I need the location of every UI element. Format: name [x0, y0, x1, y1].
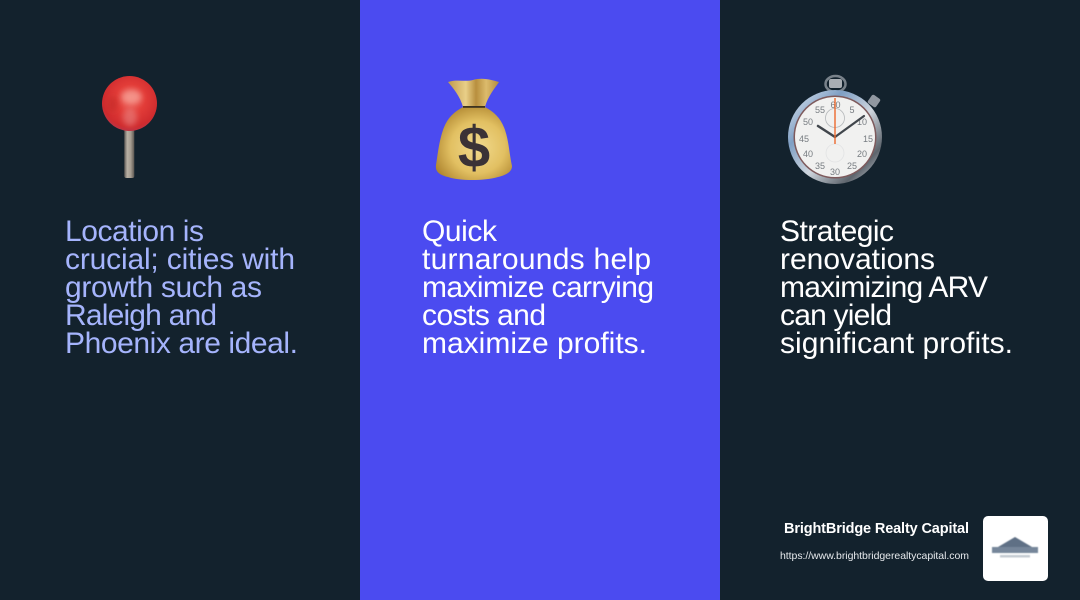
dial numerals: 60 — [830, 100, 841, 110]
text: renovation tip: renovations — [780, 243, 935, 276]
text: turnaround tip: Quick — [422, 215, 498, 248]
text: turnaround tip — [422, 215, 654, 360]
dial numerals: 15 — [863, 134, 873, 144]
dial numerals: 35 — [815, 161, 825, 171]
text: renovation tip: maximizing ARV — [780, 271, 988, 304]
dial numerals: 10 — [857, 117, 867, 127]
panel: location — [0, 0, 360, 600]
dial numerals: 30 — [830, 167, 840, 177]
text: renovation tip: significant profits. — [780, 327, 1013, 360]
website url: https://www.brightbridgerealtycapital.com — [780, 550, 969, 562]
dial numerals: 55 — [815, 105, 825, 115]
icon: round pushpin — [102, 76, 157, 178]
text: location tip: crucial; cities with — [65, 243, 295, 276]
text: location tip: Location is — [65, 215, 204, 248]
logo — [983, 516, 1048, 581]
text: location tip: Raleigh and — [65, 299, 217, 332]
dollar sign: $ — [458, 115, 490, 180]
text: location tip — [65, 215, 298, 360]
text: renovation tip: can yield — [780, 299, 892, 332]
icon: stopwatch — [788, 76, 882, 184]
text: renovation tip — [780, 215, 1013, 360]
dial numerals: 50 — [803, 117, 813, 127]
text: location tip: Phoenix are ideal. — [65, 327, 298, 360]
panel: renovations — [720, 0, 1080, 600]
dial numerals: 45 — [799, 134, 809, 144]
dial numerals: 5 — [849, 105, 855, 115]
dial numerals: 40 — [803, 149, 813, 159]
dial numerals: 20 — [857, 149, 867, 159]
text: renovation tip: Strategic — [780, 215, 894, 248]
text: turnaround tip: costs and — [422, 299, 546, 332]
brand name: BrightBridge Realty Capital — [784, 521, 969, 537]
dial numerals — [799, 100, 873, 177]
dial numerals: 25 — [847, 161, 857, 171]
text: turnaround tip: turnarounds help — [422, 243, 651, 276]
panel: quick turnarounds — [360, 0, 720, 600]
icon: money bag — [436, 79, 512, 180]
text: turnaround tip: maximize profits. — [422, 327, 647, 360]
brand footer — [780, 516, 1048, 581]
text: location tip: growth such as — [65, 271, 262, 304]
text: turnaround tip: maximize carrying — [422, 271, 654, 304]
